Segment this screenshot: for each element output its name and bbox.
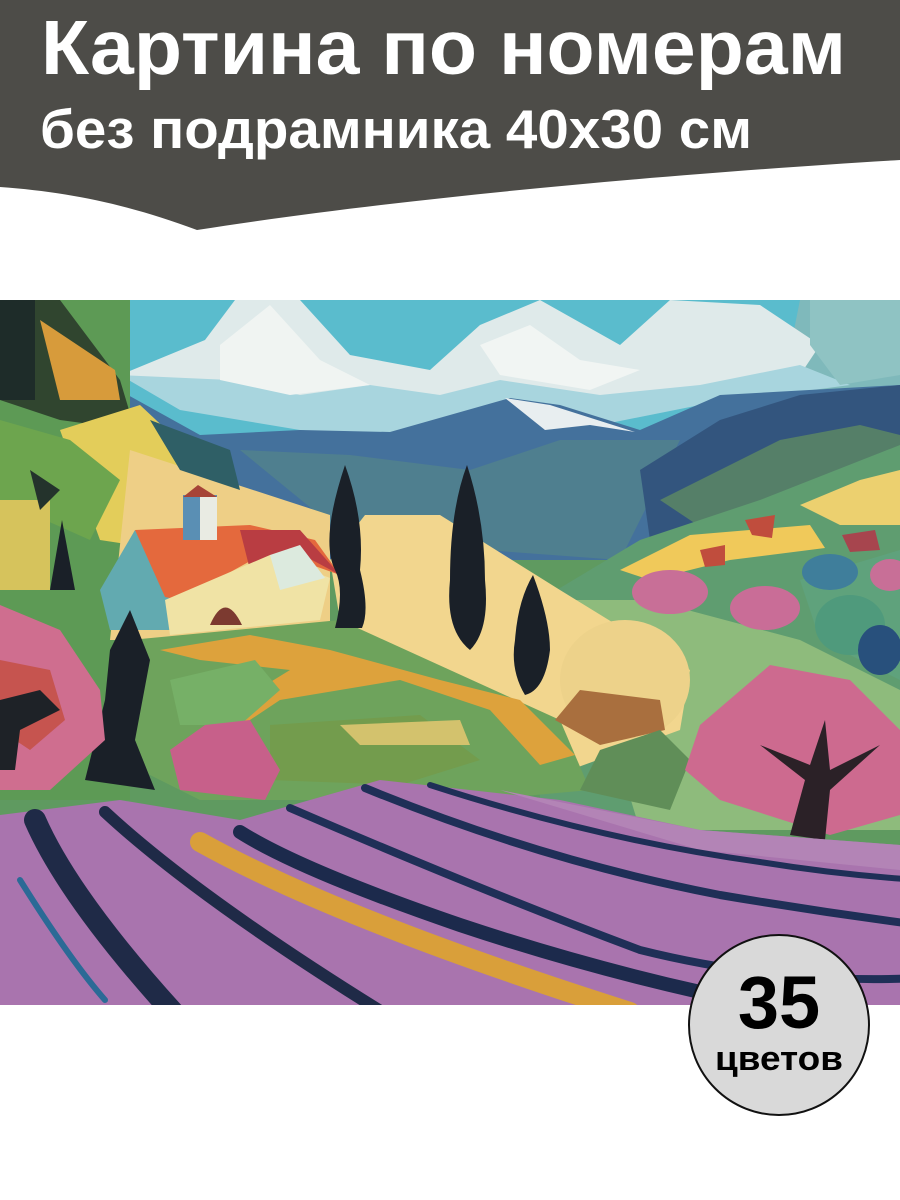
painting: lavender landscape [0, 300, 900, 1020]
pink trees [0, 605, 900, 840]
cottage [100, 485, 340, 635]
subtitle: без подрамника 40x30 см [40, 98, 752, 160]
badge: 35 colors [689, 935, 869, 1115]
banner [0, 0, 900, 230]
central fields [120, 515, 690, 810]
right hills [540, 445, 900, 830]
mountains [110, 385, 900, 560]
lavender field [0, 780, 900, 1005]
left trees [0, 300, 330, 800]
clouds [120, 300, 900, 440]
sky [130, 300, 900, 435]
lavender row separators [20, 785, 900, 1020]
title: Картина по номерам [41, 5, 846, 91]
cypress trees [50, 465, 550, 790]
badge number: 35 [738, 961, 820, 1044]
badge label: цветов [715, 1040, 843, 1078]
